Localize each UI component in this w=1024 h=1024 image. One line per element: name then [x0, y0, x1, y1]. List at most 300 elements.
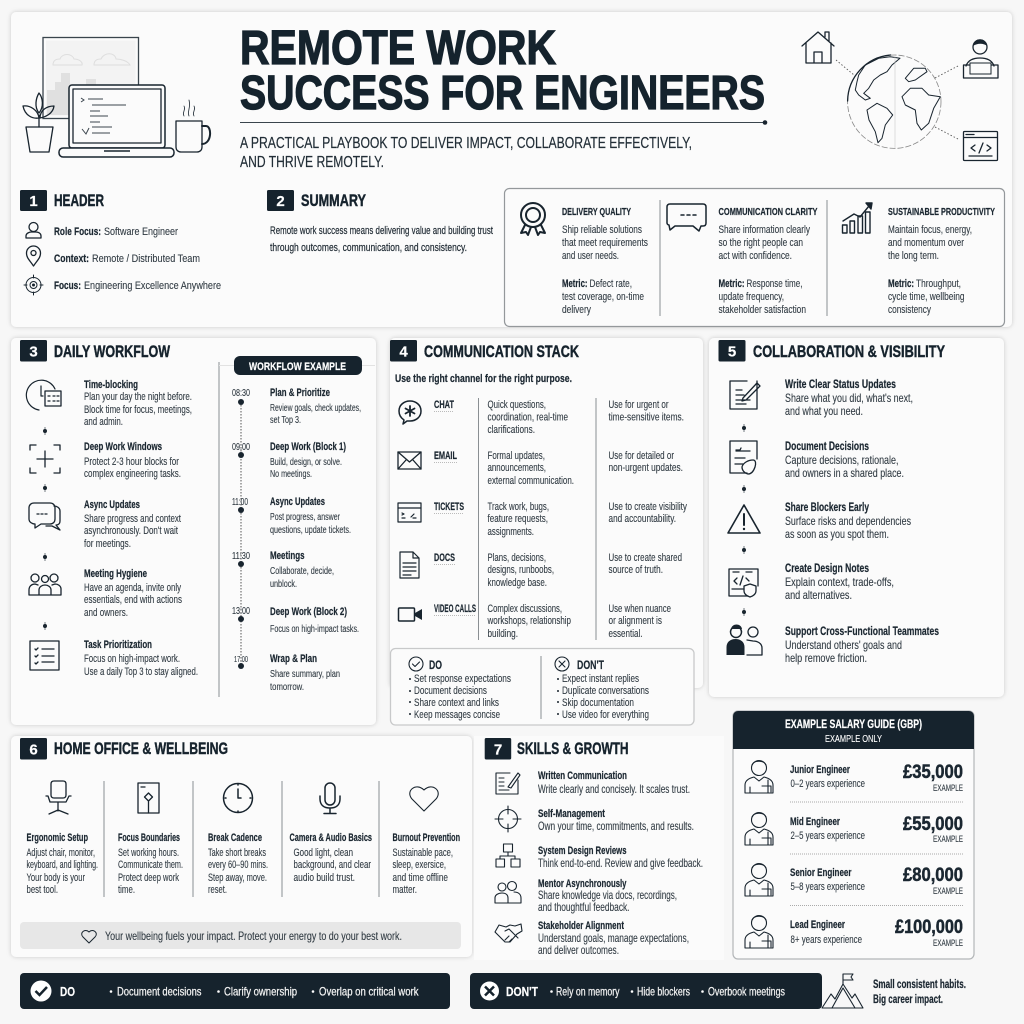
text: async updates — [84, 499, 181, 550]
heading: header: HEADER — [54, 192, 104, 210]
badge 6: 6 — [29, 742, 38, 758]
step: deep work block 1 — [270, 441, 346, 480]
panel: skills and growth — [474, 736, 724, 960]
icon: speech bubble — [667, 204, 706, 231]
pill: workflow example: WORKFLOW EXAMPLE — [249, 361, 346, 373]
icon: team — [29, 574, 61, 595]
card: delivery quality: DELIVERY QUALITY — [562, 207, 631, 218]
text: create design notes: Explain context, trade-offs, — [785, 575, 894, 589]
icon: checklist — [30, 641, 59, 670]
row: lead engineer: Lead Engineer — [790, 919, 846, 931]
icon: video camera — [398, 608, 422, 621]
closing message — [873, 977, 966, 1006]
summary text: through outcomes, communication, and consistency. — [270, 242, 467, 254]
row: video calls: workshops, relationship — [487, 615, 571, 627]
icon: mountain flag — [822, 974, 863, 1008]
card: delivery quality: delivery — [562, 304, 591, 316]
row: email: Use for detailed or — [608, 450, 674, 462]
text: deep work windows: complex engineering tasks. — [84, 468, 181, 480]
column: focus boundaries: time. — [118, 884, 135, 896]
row: docs: Use to create shared — [608, 552, 682, 564]
intro text: Use the right channel for the right purpose. — [395, 373, 572, 385]
heading: communication stack: COMMUNICATION STACK — [424, 343, 579, 361]
connector dot — [742, 485, 746, 493]
bar: don't: Overbook meetings — [708, 984, 785, 998]
skill: system design reviews: Think end-to-end. Review and give feedback. — [538, 856, 703, 870]
row: junior engineer: EXAMPLE — [933, 783, 963, 793]
do list: Keep messages concise — [414, 709, 500, 721]
bar: do — [20, 973, 450, 1009]
text: task prioritization: Task Prioritization — [84, 639, 152, 651]
bar: do: Document decisions — [117, 984, 202, 998]
row: senior engineer: Senior Engineer — [790, 867, 852, 879]
connector dot — [742, 546, 746, 554]
icon: warning — [728, 505, 760, 533]
icon: chat — [399, 401, 421, 424]
step: plan and prioritize: Review goals, check updates, — [270, 403, 361, 414]
column: break cadence: Break Cadence — [208, 832, 262, 844]
badge 3: 3 — [29, 344, 38, 360]
step: deep work block 2 — [270, 606, 359, 635]
step: plan and prioritize: Plan & Prioritize — [270, 387, 330, 399]
icon: mentoring people — [495, 882, 521, 903]
skill: system design reviews: System Design Reviews — [538, 845, 626, 857]
text: share blockers early: Surface risks and dependencies — [785, 514, 911, 528]
timeline: 11:00 — [232, 497, 248, 508]
heading: daily workflow: DAILY WORKFLOW — [54, 343, 170, 361]
icon: heart — [410, 787, 438, 811]
text: deep work windows: Protect 2-3 hour blocks for — [84, 456, 179, 468]
column: camera and audio basics: background, and clear — [294, 859, 371, 871]
step: async updates: Post progress, answer — [270, 512, 340, 523]
icon: chair — [46, 781, 71, 814]
row: video calls — [434, 603, 671, 640]
text: task prioritization: Use a daily Top 3 to stay aligned. — [84, 666, 198, 678]
timeline: 13:00 — [232, 606, 250, 617]
summary text — [270, 225, 493, 254]
row: mid engineer: Mid Engineer — [790, 816, 841, 828]
text: meeting hygiene — [84, 568, 182, 619]
column: camera and audio basics — [290, 832, 372, 884]
row: mid engineer: EXAMPLE — [933, 834, 963, 844]
do list: Share context and links — [414, 697, 499, 709]
text: document decisions: Capture decisions, rationale, — [785, 453, 898, 467]
column: ergonomic setup: best tool. — [26, 884, 58, 896]
do list — [409, 657, 511, 721]
card: sustainable productivity: Metric: — [888, 278, 914, 290]
row: email: announcements, — [488, 462, 546, 474]
icon: rosette — [521, 203, 545, 235]
text: share blockers early: Share Blockers Early — [785, 500, 869, 514]
column: ergonomic setup: keyboard, and lighting. — [26, 859, 98, 871]
step: async updates: Async Updates — [270, 496, 325, 508]
bar: do: Overlap on critical work — [319, 984, 419, 998]
text: document decisions: Document Decisions — [785, 439, 869, 453]
row: chat: clarifications. — [488, 424, 535, 436]
badge 1: 1 — [29, 193, 38, 210]
wellbeing banner: Your wellbeing fuels your impact. Protect your energy to do your best work. — [105, 929, 402, 943]
column: burnout prevention: sleep, exersice, — [392, 859, 446, 871]
row: email: external communication. — [488, 475, 574, 487]
icon: lead engineer — [745, 916, 773, 948]
row: tickets: feature requests, — [488, 513, 548, 525]
row: mid engineer: 2–5 years experience — [790, 830, 865, 842]
text: write clear status updates: Write Clear Status Updates — [785, 377, 896, 391]
text: support cross-functional teammates — [785, 624, 939, 665]
row: email — [434, 450, 683, 487]
badge 2 — [267, 190, 294, 211]
icon: target — [24, 275, 43, 295]
summary text: Remote work success means delivering value and building trust — [270, 225, 493, 237]
text: task prioritization — [84, 639, 198, 678]
row: lead engineer: EXAMPLE — [933, 938, 963, 948]
role focus — [54, 226, 178, 238]
card: sustainable productivity — [888, 207, 995, 316]
row: lead engineer: 8+ years experience — [790, 934, 862, 946]
role focus: Role Focus: — [54, 226, 101, 238]
skill: self-management — [538, 808, 694, 833]
focus: Focus: — [54, 280, 81, 292]
icon: chat bubbles — [29, 503, 60, 530]
text: async updates: Share progress and context — [84, 513, 181, 525]
row: docs: designs, runboobs, — [488, 564, 554, 576]
text: write clear status updates: Share what you did, what's next, — [785, 391, 913, 405]
card: do and don't — [390, 648, 694, 725]
icon: target crosshair — [495, 806, 521, 832]
don't list — [555, 657, 649, 721]
step: wrap and plan: Share summary, plan — [270, 669, 340, 680]
row: tickets: TICKETS — [434, 501, 464, 513]
text: deep work windows: Deep Work Windows — [84, 441, 162, 453]
text: task prioritization: Focus on high-impact work. — [84, 653, 180, 665]
row: tickets — [434, 501, 687, 538]
card: communication clarity — [718, 207, 818, 316]
row: video calls: essential. — [608, 628, 642, 640]
row: chat: coordination, real-time — [488, 412, 568, 424]
salary header: EXAMPLE SALARY GUIDE (GBP) — [785, 717, 922, 731]
bar: don't: Hide blockers — [637, 984, 690, 998]
column: ergonomic setup: Adjust chair, monitor, — [26, 847, 95, 859]
wellbeing banner — [20, 922, 461, 949]
text: async updates: Async Updates — [84, 499, 140, 511]
text: share blockers early: as soon as you spot them. — [785, 527, 889, 541]
column: ergonomic setup: Your body is your — [26, 872, 85, 884]
skill: stakeholder alignment: Stakeholder Alignment — [538, 920, 624, 932]
row: tickets: Use to create visibility — [608, 501, 687, 513]
panel: home office and wellbeing — [11, 736, 472, 957]
badge 6 — [20, 738, 47, 760]
icon: document — [400, 552, 419, 578]
column: camera and audio basics: audio build trust. — [294, 872, 355, 884]
row: lead engineer: £100,000 — [895, 916, 963, 938]
subtitle: A PRACTICAL PLAYBOOK TO DELIVER IMPACT, COLLABORATE EFFECTIVELY, — [240, 135, 692, 152]
bar: don't: Rely on memory — [556, 984, 620, 998]
closing message: Big career impact. — [873, 992, 943, 1006]
card: communication clarity: Response time, — [746, 278, 802, 290]
timeline — [232, 388, 250, 669]
column: burnout prevention: Burnout Prevention — [392, 832, 460, 844]
row: mid engineer — [790, 813, 963, 844]
column: break cadence — [208, 832, 268, 896]
bar: don't: DON'T — [506, 985, 538, 999]
skill: system design reviews — [538, 845, 703, 870]
step: deep work block 2: Deep Work (Block 2) — [270, 606, 347, 618]
panel: salary guide — [733, 711, 974, 959]
don't list: Use video for everything — [562, 709, 649, 721]
icon: location pin — [26, 246, 41, 266]
don't list: DON'T — [577, 658, 604, 672]
don't list: Duplicate conversations — [562, 685, 649, 697]
illustration: home desk with laptop — [23, 38, 210, 157]
text: time-blocking: Plan your day the night before. — [84, 391, 192, 403]
icon: handshake — [495, 924, 522, 942]
column: burnout prevention — [392, 832, 460, 896]
panel: daily workflow — [11, 338, 376, 725]
icon: junior engineer — [745, 760, 773, 793]
step: meetings: Collaborate, decide, — [270, 566, 334, 577]
icon: door — [138, 783, 159, 813]
row: junior engineer: Junior Engineer — [790, 764, 851, 776]
text: time-blocking: Time-blocking — [84, 379, 138, 391]
icon: system diagram — [496, 844, 520, 867]
section 1: header — [20, 190, 221, 295]
text: time-blocking: Block time for focus, meetings, — [84, 404, 192, 416]
text: meeting hygiene: Have an agenda, invite only — [84, 582, 181, 594]
badge 7 — [485, 738, 511, 760]
row: chat — [434, 399, 684, 436]
badge 3 — [20, 340, 47, 362]
skill: mentor asynchronously: Share knowledge via docs, recordings, — [538, 888, 677, 902]
card: delivery quality: and user needs. — [562, 250, 619, 262]
column: burnout prevention: matter. — [392, 884, 417, 896]
card: delivery quality: Metric: — [562, 278, 588, 290]
skill: written communication: Written Communication — [538, 770, 627, 782]
connector dot — [742, 424, 746, 432]
column: focus boundaries: Set working hours. — [118, 847, 179, 859]
row: video calls: VIDEO CALLS — [434, 603, 476, 615]
row: chat: Use for urgent or — [608, 399, 669, 411]
section 2: summary — [267, 190, 493, 254]
column: break cadence: reset. — [208, 884, 227, 896]
icon: two teammates — [726, 624, 762, 655]
card: communication clarity: act with confidence. — [718, 250, 792, 262]
text: async updates: for meetings. — [84, 538, 131, 550]
timeline: 08:30 — [232, 388, 250, 399]
timeline: 17:00 — [234, 655, 248, 664]
skill: self-management: Own your time, commitments, and results. — [538, 819, 694, 833]
panel: collaboration and visibility — [709, 338, 1004, 697]
badge 5 — [718, 340, 746, 362]
row: senior engineer: EXAMPLE — [933, 886, 963, 896]
icon: clock and calendar — [26, 380, 61, 410]
step: meetings: Meetings — [270, 550, 304, 562]
row: video calls: Use when nuance — [608, 603, 671, 615]
icon: email — [398, 452, 421, 469]
text: time-blocking: and admin. — [84, 416, 123, 428]
row: senior engineer: £80,000 — [903, 864, 963, 886]
don't list: Expect instant replies — [562, 673, 639, 685]
step: async updates: questions, update tickets. — [270, 525, 351, 536]
skill: stakeholder alignment: Understand goals, manage expectations, — [538, 931, 689, 945]
context: Context: — [54, 253, 89, 265]
row: junior engineer: £35,000 — [903, 761, 963, 783]
connector dot — [43, 427, 47, 435]
column: camera and audio basics: Good light, clean — [294, 847, 353, 859]
text: meeting hygiene: essentials, end with actions — [84, 594, 182, 606]
text: create design notes — [785, 561, 894, 602]
badge 4 — [390, 340, 417, 362]
column: focus boundaries — [118, 832, 183, 896]
title: SUCCESS FOR ENGINEERS — [240, 67, 765, 120]
column: ergonomic setup: Ergonomic Setup — [26, 832, 88, 844]
context — [54, 253, 200, 265]
text: support cross-functional teammates: Support Cross-Functional Teammates — [785, 624, 939, 638]
step: plan and prioritize — [270, 387, 361, 426]
icon: microphone — [320, 783, 340, 814]
connector dot — [742, 608, 746, 616]
step: async updates — [270, 496, 351, 536]
row: email: Formal updates, — [488, 450, 545, 462]
badge 2: 2 — [276, 193, 285, 210]
card: communication clarity: COMMUNICATION CLARITY — [718, 207, 818, 218]
row: chat: time-sensitive items. — [608, 412, 684, 424]
column: break cadence: every 60–90 mins. — [208, 859, 268, 871]
text: meeting hygiene: Meeting Hygiene — [84, 568, 147, 580]
text: meeting hygiene: and owners. — [84, 607, 128, 619]
column: focus boundaries: Protect deep work — [118, 872, 179, 884]
step: deep work block 2: Focus on high-impact tasks. — [270, 624, 359, 635]
card: sustainable productivity: consistency — [888, 304, 931, 316]
heading: collaboration and visibility: COLLABORATION & VISIBILITY — [753, 343, 945, 361]
pill: workflow example — [234, 356, 362, 375]
step: meetings — [270, 550, 334, 590]
row: email: EMAIL — [434, 450, 457, 462]
connector dot — [43, 553, 47, 561]
text: document decisions: and owners in a shared place. — [785, 466, 904, 480]
skill: written communication — [538, 770, 690, 796]
context: Remote / Distributed Team — [92, 253, 200, 265]
panel: top header and summary — [11, 12, 1012, 327]
row: video calls: Complex discussions, — [488, 603, 562, 615]
skill: mentor asynchronously: Mentor Asynchronously — [538, 878, 627, 890]
focus: Engineering Excellence Anywhere — [84, 280, 221, 292]
icon: senior engineer — [745, 864, 773, 896]
row: video calls: building. — [488, 628, 518, 640]
step: deep work block 1: Deep Work (Block 1) — [270, 441, 346, 453]
row: email: non-urgent updates. — [608, 462, 683, 474]
row: senior engineer: 5–8 years experience — [790, 881, 865, 893]
skill: mentor asynchronously: and thoughtful feedback. — [538, 900, 630, 914]
timeline: 09:00 — [232, 442, 250, 453]
row: docs — [434, 552, 682, 589]
row: tickets: Track work, bugs, — [488, 501, 549, 513]
heading: home office and wellbeing: HOME OFFICE & WELLBEING — [54, 740, 228, 758]
card: delivery quality: Ship reliable solutions — [562, 224, 642, 236]
column: ergonomic setup — [26, 832, 98, 896]
icon: check — [30, 980, 52, 1002]
badge 4: 4 — [399, 344, 408, 360]
text: document decisions — [785, 439, 904, 480]
panel: outcome cards — [504, 188, 1004, 326]
step: wrap and plan — [270, 653, 340, 693]
step: meetings: unblock. — [270, 579, 297, 590]
row: senior engineer — [790, 864, 963, 896]
icon: cross — [480, 982, 499, 1000]
row: chat: CHAT — [434, 399, 454, 411]
card: sustainable productivity: Throughput, — [916, 278, 961, 290]
card: communication clarity: stakeholder satisfaction — [718, 304, 806, 316]
row: junior engineer: 0–2 years experience — [790, 778, 865, 790]
icon: mid engineer — [745, 812, 773, 845]
skill: stakeholder alignment: and deliver outcomes. — [538, 943, 619, 957]
column: focus boundaries: Focus Boundaries — [118, 832, 180, 844]
skill: stakeholder alignment — [538, 920, 689, 957]
title — [240, 22, 765, 120]
skill: written communication: Write clearly and concisely. It scales trust. — [538, 782, 690, 796]
row: docs: source of truth. — [608, 564, 663, 576]
icon: tickets — [398, 503, 421, 522]
card: sustainable productivity: Maintain focus, energy, — [888, 224, 972, 236]
column: break cadence: Step away, move. — [208, 872, 267, 884]
icon: growth chart — [842, 203, 872, 233]
panel: communication stack — [390, 338, 703, 725]
connector dot — [43, 484, 47, 492]
text: support cross-functional teammates: help remove friction. — [785, 651, 867, 665]
text: time-blocking — [84, 379, 192, 428]
card: delivery quality — [562, 207, 648, 316]
card: communication clarity: so the right people can — [718, 237, 803, 249]
salary header — [733, 711, 974, 749]
focus — [54, 280, 221, 292]
column: break cadence: Take short breaks — [208, 847, 266, 859]
icon: writing notebook — [496, 773, 520, 794]
text: create design notes: and alternatives. — [785, 588, 852, 602]
skill: mentor asynchronously — [538, 878, 677, 914]
card: delivery quality: that meet requirements — [562, 237, 648, 249]
icon: clock — [224, 784, 252, 812]
skill: self-management: Self-Management — [538, 808, 605, 820]
role focus: Software Engineer — [104, 226, 178, 238]
row: docs: Plans, decisions, — [488, 552, 546, 564]
card: communication clarity: Metric: — [718, 278, 744, 290]
do list: DO — [429, 658, 442, 672]
card: sustainable productivity: and momentum over — [888, 237, 964, 249]
card: delivery quality: test coverage, on-time — [562, 291, 644, 303]
closing message: Small consistent habits. — [873, 977, 966, 991]
do list: Set response expectations — [414, 673, 511, 685]
step: plan and prioritize: set Top 3. — [270, 415, 301, 426]
text: write clear status updates — [785, 377, 913, 418]
icon: status note — [730, 381, 760, 409]
do list: Document decisions — [414, 685, 487, 697]
card: communication clarity: Share information clearly — [718, 224, 810, 236]
row: tickets: assignments. — [488, 526, 534, 538]
card: sustainable productivity: the long term. — [888, 250, 939, 262]
row: docs: knowledge base. — [488, 577, 547, 589]
row: video calls: or alignment is — [608, 615, 662, 627]
bar: do: DO — [60, 985, 75, 999]
step: wrap and plan: Wrap & Plan — [270, 653, 317, 665]
heading: skills and growth: SKILLS & GROWTH — [517, 740, 628, 758]
icon: focus frame — [30, 445, 60, 473]
step: wrap and plan: tomorrow. — [270, 682, 304, 693]
timeline: 11:30 — [232, 551, 250, 562]
bar: do: Clarify ownership — [224, 984, 297, 998]
icon: decision doc — [730, 441, 757, 474]
badge 1 — [20, 190, 47, 211]
don't list: Skip documentation — [562, 697, 634, 709]
text: create design notes: Create Design Notes — [785, 561, 869, 575]
